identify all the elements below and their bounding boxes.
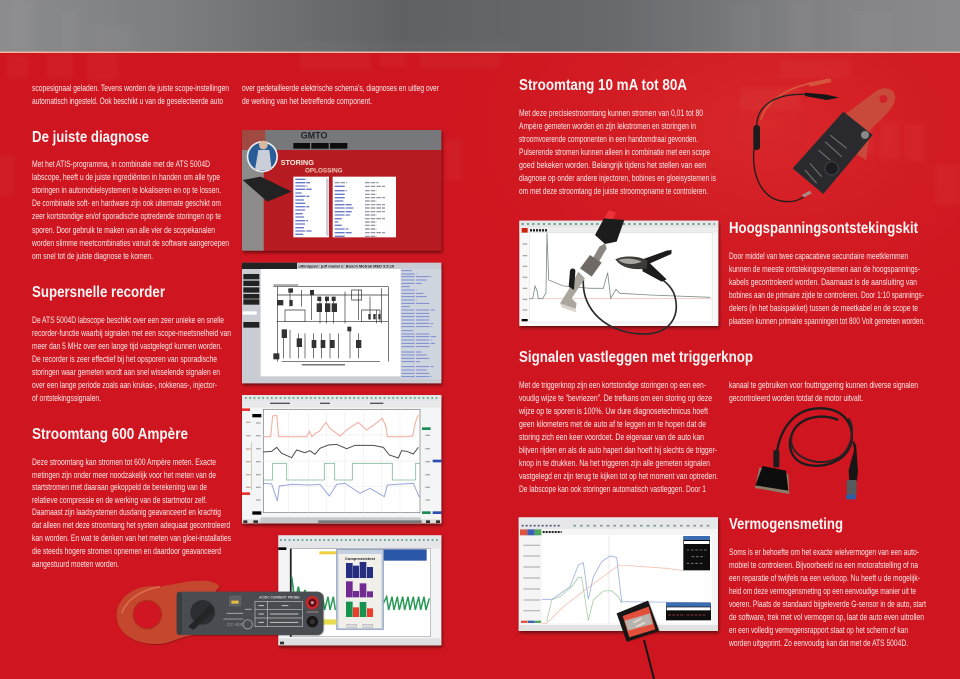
text block: De juiste diagnose: sporen. Door gebruik te maken van alle vier de scopekanalen — [32, 225, 215, 235]
text block: De juiste diagnose: om snel tot de juiste diagnose te komen. — [32, 251, 153, 261]
text block: Signalen vastleggen, column 2 — [729, 380, 918, 403]
text block: Stroomtang 10 mA tot 80A: Ampère gemeten worden en zijn lekstromen en storingen in — [519, 121, 696, 131]
heading: De juiste diagnose: De juiste diagnose — [32, 129, 149, 146]
text block: Supersnelle recorder: De ATS 5004D labscope beschikt over een zeer unieke en snelle — [32, 315, 224, 325]
text block: De juiste diagnose: storingen in automobielsystemen te lokaliseren en op te lossen. — [32, 185, 221, 195]
text block: Stroomtang 600 Ampère: Deze stroomtang kan stromen tot 600 Ampère meten. Exacte — [32, 457, 216, 467]
text block: De juiste diagnose — [31, 159, 229, 261]
text block: Supersnelle recorder: of ontstekingssignalen. — [32, 393, 101, 403]
heading: Vermogensmeting: Vermogensmeting — [729, 516, 843, 533]
screenshot: GMTO storing oplossing software — [242, 130, 441, 251]
heading: Stroomtang 10 mA tot 80A: Stroomtang 10 mA tot 80A — [519, 77, 687, 94]
text block: continued intro, middle: de werking van het betreffende component. — [242, 96, 372, 106]
text block: continued intro, left: automatisch ingesteld. Ook beschikt u van de geselecteerde auto — [32, 96, 223, 106]
text block: De juiste diagnose: Met het ATIS-programma, in combinatie met de ATS 5004D — [32, 159, 210, 169]
text block: De juiste diagnose: De combinatie soft- en hardware zijn ook uitermate geschikt om — [32, 198, 221, 208]
icon: G-sensor module with cable — [617, 601, 659, 679]
heading: Supersnelle recorder: Supersnelle recorder — [32, 284, 165, 301]
text block: Stroomtang 600 Ampère: kan worden. En wat te denken van het meten van gloei-installaties — [32, 533, 231, 543]
text block: Signalen vastleggen, column 1: geen kilometers met de auto af te leggen en te hopen dat de — [519, 419, 706, 429]
text block: Stroomtang 600 Ampère: aangestuurd moeten worden. — [32, 559, 119, 569]
heading: Stroomtang 600 Ampère: Stroomtang 600 Ampère — [32, 426, 188, 443]
text block: Signalen vastleggen, column 1: vastgelegd en zijn terug te kijken tot op het moment van optreden. — [519, 471, 718, 481]
heading: Hoogspanningsontstekingskit: Hoogspanningsontstekingskit — [729, 220, 919, 237]
screenshot: GMTO storing oplossing software: OPLOSSING — [305, 167, 343, 174]
screenshot: compression test with bar charts — [278, 535, 441, 645]
text block: Signalen vastleggen, column 1: wijze op te sporen is 100%. Uw dure diagnosetechnicus hoeft — [518, 406, 708, 416]
heading: Signalen vastleggen met triggerknop: Signalen vastleggen met triggerknop — [519, 349, 753, 366]
icon: 600 A current clamp: CC-600 — [227, 622, 244, 628]
icon: 600 A current clamp — [117, 581, 323, 644]
text block: Stroomtang 10 mA tot 80A: stroomvoerende componenten in een handomdraai gevonden. — [519, 134, 698, 144]
text block: Signalen vastleggen, column 1: knop in te drukken. Na het triggeren zijn alle gemeten signalen — [519, 458, 710, 468]
icon: small current clamp with test leads — [753, 78, 895, 202]
text block: Stroomtang 600 Ampère: die steeds hogere stromen opnemen en daardoor geavanceerd — [32, 546, 221, 556]
text block: De juiste diagnose: zeer kortstondige en/of sporadische optredende storingen op te — [32, 211, 221, 221]
text block: Stroomtang 600 Ampère: relatieve compressie en de werking van de startmotor zelf. — [32, 495, 207, 505]
text block: continued intro, middle: over gedetailleerde elektrische schema's, diagnoses en uitleg over — [242, 83, 439, 93]
screenshot: GMTO storing oplossing software: GMTO — [301, 131, 327, 141]
text block: Supersnelle recorder: recorder-functie waarbij signalen met een scope-meetsnelheid van — [32, 328, 231, 338]
screenshot: trigger scope waveform — [519, 221, 718, 326]
text block: Stroomtang 600 Ampère: startstromen met daaraan gekoppeld de berekening van de — [32, 482, 207, 492]
text block: De juiste diagnose: labscope, heeft u de juiste ingrediënten in handen om alle type — [32, 172, 220, 182]
text block: Supersnelle recorder — [32, 315, 231, 403]
text block: Stroomtang 10 mA tot 80A: om met deze stroomtang de juiste stroomopname te controleren. — [519, 186, 708, 196]
screenshot: wiring schematic — [242, 263, 441, 383]
background: grey top band — [0, 0, 960, 52]
text block: Stroomtang 10 mA tot 80A: Pulserende stromen kunnen alleen in combinatie met een scope — [519, 147, 710, 157]
text block: Stroomtang 10 mA tot 80A: diagnose op onder andere injectoren, bobines en gloeisystemen is — [519, 173, 716, 183]
text block: Signalen vastleggen, column 1: storing zich een keer voordoet. De eigenaar van de auto kan — [519, 432, 704, 442]
text block: Supersnelle recorder: over een lange periode zoals aan krukas-, nokkenas-, injector- — [32, 380, 217, 390]
text block: Signalen vastleggen, column 1: De labscope kan ook storingen automatisch vastleggen. Door 1 — [519, 484, 706, 494]
icon: trigger button cable with D-sub connector — [755, 408, 858, 499]
text block: continued intro, left — [32, 83, 229, 106]
text block: Stroomtang 600 Ampère: Daarnaast zijn laadsystemen dusdanig geavanceerd en krachtig — [32, 507, 221, 517]
text block: continued intro, left: scopesignaal geladen. Tevens worden de juiste scope-instellingen — [32, 83, 229, 93]
text block: Signalen vastleggen, column 1 — [518, 380, 718, 494]
text block: Hoogspanningsontstekingskit — [729, 251, 925, 326]
text block: Stroomtang 600 Ampère: dat alleen met deze stroomtang het system adequaat gecontroleerd — [32, 520, 230, 530]
screenshot: compression test with bar charts: Compressietest — [345, 556, 376, 561]
text block: Signalen vastleggen, column 1: blijven rijden en als de auto hapert dan hoeft hij slechts de trigger- — [519, 445, 717, 455]
text block: Supersnelle recorder: De recorder is zeer effectief bij het opsporen van sporadische — [32, 354, 217, 364]
divider line below the grey band — [0, 52, 960, 53]
text block: De juiste diagnose: worden slimme meetcombinaties vanuit de software aangeroepen — [31, 238, 229, 248]
icon: 600 A current clamp: AC/DC CURRENT PROBE — [259, 596, 300, 600]
text block: Signalen vastleggen, column 2: gecontroleerd worden totdat de motor uitvalt. — [729, 393, 863, 403]
text block: Supersnelle recorder: storingen waar gemeten wordt aan snel wisselende signalen en — [32, 367, 220, 377]
text block: Stroomtang 600 Ampère — [32, 457, 231, 569]
screenshot: power measurement graph — [519, 517, 718, 631]
screenshot: wiring schematic: uitknippen: pdf model x: Bosch Motrak MED 9.5.10 — [298, 263, 395, 268]
text block: Signalen vastleggen, column 1: Met de triggerknop zijn een kortstondige storingen op een een- — [519, 380, 706, 390]
text block: Stroomtang 10 mA tot 80A: goed bekeken worden. Belangrijk tijdens het stellen van een — [519, 160, 706, 170]
text block: Vermogensmeting — [728, 547, 926, 648]
text block: continued intro, middle — [242, 83, 439, 106]
text block: Supersnelle recorder: meer dan 5 MHz over een lange tijd vastgelegd kunnen worden. — [32, 341, 222, 351]
screenshot: GMTO storing oplossing software: STORING — [281, 158, 314, 167]
text block: Stroomtang 600 Ampère: metingen zijn onder meer noodzakelijk voor het meten van de — [32, 470, 216, 480]
text block: Signalen vastleggen, column 1: voudig wijze te “bevriezen”. De trefkans om een storing op deze — [519, 393, 712, 403]
icon: high-voltage clip and crocodile clamp — [560, 210, 676, 334]
text block: Stroomtang 10 mA tot 80A: Met deze precisiestroomtang kunnen stromen van 0,01 tot 80 — [519, 108, 703, 118]
text block: Stroomtang 10 mA tot 80A — [519, 108, 716, 196]
screenshot: four-channel scope traces — [242, 395, 441, 523]
